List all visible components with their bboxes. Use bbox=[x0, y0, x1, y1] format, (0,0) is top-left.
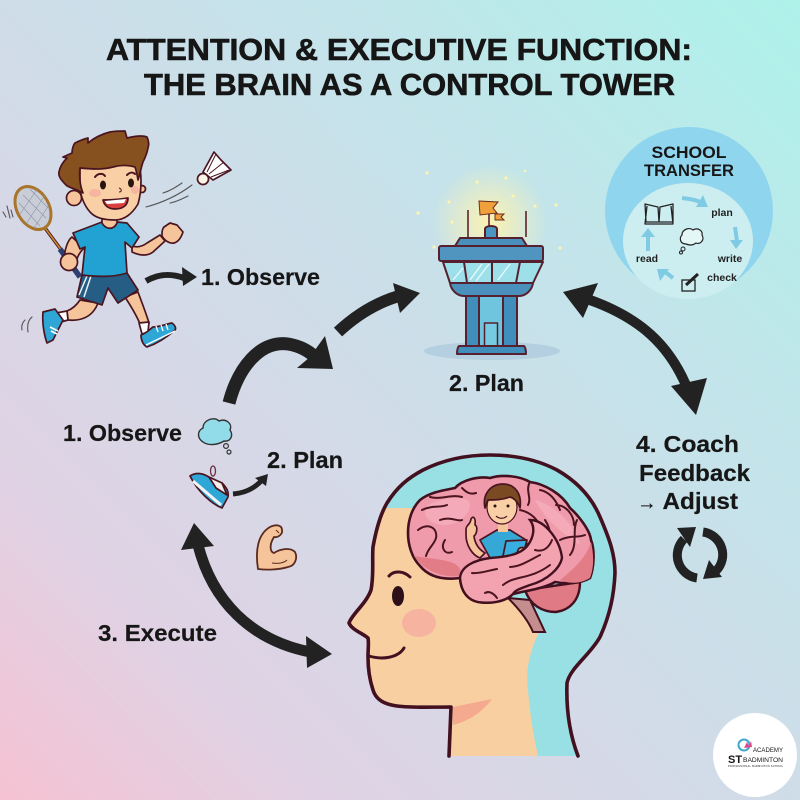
front sock bbox=[139, 322, 149, 334]
label: 4. Coach Feedback Adjust: 4. Coach bbox=[636, 431, 739, 457]
head outline bbox=[349, 455, 615, 756]
cycle labels: write bbox=[717, 253, 742, 265]
shuttlecock bbox=[198, 152, 231, 184]
clipboard bbox=[502, 540, 527, 561]
icon: pencil and paper bbox=[682, 274, 698, 291]
ear bbox=[66, 190, 82, 206]
little coach bbox=[466, 484, 530, 561]
sparkles bbox=[416, 170, 562, 250]
back shoe bbox=[43, 309, 63, 343]
front shoe bbox=[141, 323, 176, 347]
brain shading bbox=[414, 542, 593, 583]
icon: flexed arm bbox=[257, 525, 296, 570]
heading bbox=[644, 143, 734, 180]
door bbox=[484, 323, 498, 346]
heading: TRANSFER bbox=[644, 161, 734, 180]
brain bbox=[408, 476, 594, 603]
face bbox=[80, 160, 141, 220]
title: THE BRAIN AS A CONTROL TOWER bbox=[144, 68, 675, 102]
shadow bbox=[424, 342, 560, 360]
label: 3. Execute: 3. Execute bbox=[98, 620, 217, 646]
logo mark bbox=[738, 740, 752, 750]
label: 4. Coach Feedback Adjust: → Adjust bbox=[637, 488, 738, 514]
cerebellum bbox=[525, 582, 580, 612]
flags bbox=[479, 201, 498, 215]
logo text: ST bbox=[728, 754, 742, 766]
head and brain illustration bbox=[340, 450, 620, 760]
logo text: ACADEMY bbox=[753, 747, 784, 754]
cycle labels: plan bbox=[711, 207, 733, 219]
smile bbox=[369, 648, 404, 658]
shorts bbox=[77, 273, 138, 305]
neck bbox=[102, 214, 117, 228]
icon: thought cloud bbox=[198, 419, 232, 454]
coach face bbox=[487, 490, 517, 524]
coach hand bbox=[518, 548, 526, 556]
head fill bbox=[340, 450, 620, 760]
back sock bbox=[56, 311, 68, 322]
roof bbox=[455, 238, 527, 246]
title: ATTENTION & EXECUTIVE FUNCTION: bbox=[106, 33, 692, 67]
temporal folds bbox=[472, 540, 552, 598]
racket bbox=[8, 180, 80, 277]
icon: shoe bbox=[190, 466, 228, 508]
icon: control tower bbox=[416, 164, 562, 360]
hair bbox=[59, 131, 149, 193]
coach features bbox=[494, 504, 510, 518]
eye and brow bbox=[389, 572, 410, 606]
windows bbox=[443, 262, 543, 283]
coach neck bbox=[498, 522, 508, 532]
coach arm and thumb bbox=[466, 517, 485, 558]
label: 2. Plan left: 2. Plan bbox=[267, 447, 343, 473]
arrow: observe curve bbox=[229, 336, 333, 403]
glow bbox=[432, 164, 548, 280]
title bbox=[106, 33, 692, 102]
lower deck bbox=[450, 283, 533, 296]
brain stem bbox=[508, 598, 545, 632]
logo badge bbox=[713, 713, 797, 797]
mouth bbox=[103, 198, 128, 209]
back leg bbox=[67, 300, 98, 320]
icon: book bbox=[645, 204, 673, 224]
icon: refresh arrows bbox=[677, 527, 723, 579]
motion lines bbox=[3, 183, 192, 332]
arrow: to tower bbox=[338, 283, 420, 332]
base bbox=[457, 346, 526, 354]
dome bbox=[485, 226, 497, 238]
cycle arrows bbox=[641, 195, 743, 281]
panel: school transfer bbox=[605, 127, 773, 299]
icon: boy playing badminton bbox=[3, 131, 231, 347]
column bbox=[466, 296, 517, 346]
hand bbox=[60, 254, 78, 270]
temporal lobe bbox=[460, 520, 562, 603]
icon: thought cloud bbox=[680, 229, 703, 254]
shirt bbox=[73, 222, 139, 276]
logo text bbox=[728, 747, 784, 768]
brain folds bbox=[418, 482, 585, 556]
cycle labels bbox=[636, 207, 742, 284]
front leg bbox=[125, 292, 149, 324]
logo text: BADMINTON bbox=[743, 758, 783, 764]
antennas bbox=[468, 207, 526, 237]
label: 4. Coach Feedback Adjust bbox=[636, 431, 751, 514]
arrow: double execute bbox=[181, 523, 332, 668]
arrow: to observe bbox=[146, 267, 197, 286]
cheek bbox=[402, 609, 436, 637]
heading: SCHOOL bbox=[652, 143, 726, 162]
open hand bbox=[162, 223, 183, 243]
label: 2. Plan top: 2. Plan bbox=[449, 370, 524, 396]
label: 1. Observe top: 1. Observe bbox=[201, 264, 320, 290]
logo text: PROFESSIONAL BADMINTON SCHOOL bbox=[728, 765, 784, 768]
right arm bbox=[132, 235, 165, 255]
eyes and brows bbox=[89, 173, 139, 197]
coach hair bbox=[484, 484, 520, 508]
label: 4. Coach Feedback Adjust: Feedback bbox=[639, 460, 751, 486]
arrow: shoe to plan bbox=[233, 474, 268, 494]
coach shirt bbox=[480, 530, 530, 558]
cycle labels: check bbox=[707, 272, 737, 284]
label: 1. Observe left: 1. Observe bbox=[63, 420, 182, 446]
left arm bbox=[64, 237, 84, 265]
cycle labels: read bbox=[636, 253, 658, 265]
arrow: double tower to feedback bbox=[563, 283, 707, 415]
